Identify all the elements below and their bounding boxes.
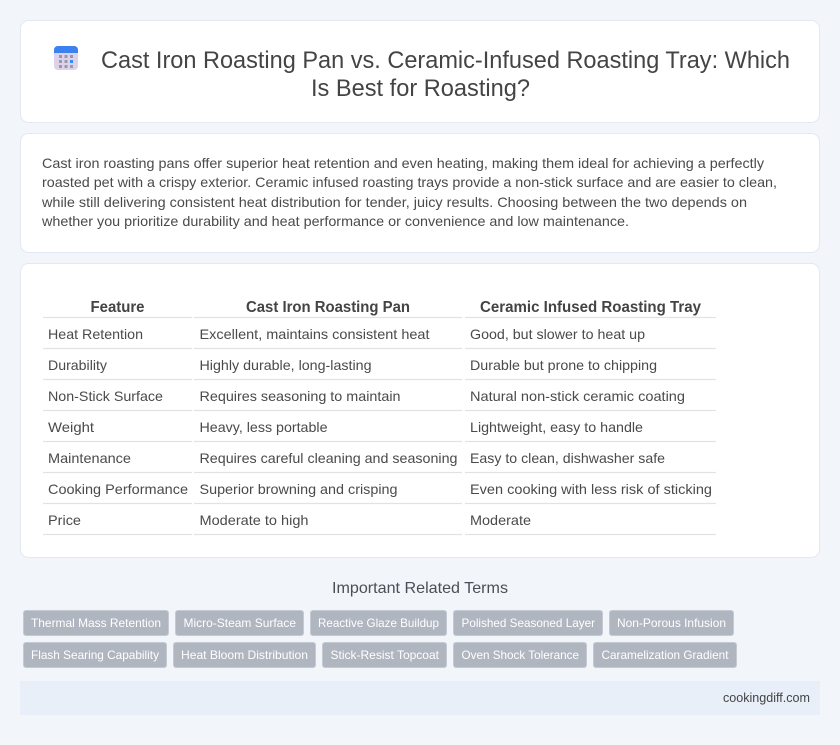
tag (322, 642, 446, 668)
tag: Caramelization Gradient (602, 648, 729, 662)
row: cooking performance: Even cooking with less risk of sticking (470, 481, 712, 497)
tag (454, 642, 586, 668)
row: durability: Durability (48, 357, 107, 373)
row: non-stick surface: Natural non-stick ceramic coating (470, 388, 685, 404)
tag: Thermal Mass Retention (31, 616, 161, 630)
summary text (41, 155, 777, 229)
tag: Flash Searing Capability (31, 648, 159, 662)
tag (594, 642, 736, 668)
row: weight: Lightweight, easy to handle (470, 419, 643, 435)
tag: Non-Porous Infusion (617, 616, 726, 630)
row: price: Price (48, 512, 81, 528)
row: heat retention: Good, but slower to heat up (470, 326, 645, 342)
table header (90, 299, 701, 316)
footer source: cookingdiff.com (723, 690, 810, 705)
panel: comparison table (20, 264, 820, 558)
tag: Micro-Steam Surface (184, 616, 296, 630)
title: Is Best for Roasting? (311, 75, 530, 102)
row: heat retention: Heat Retention (48, 326, 143, 342)
summary text: roasted pet with a crispy exterior. Ceramic infused roasting trays provide a non-stick surface and are easier to clean, (42, 174, 777, 190)
row: cooking performance (48, 481, 712, 497)
summary text: whether you prioritize durability and heat performance or convenience and low maintenance. (41, 213, 629, 229)
tag (174, 642, 316, 668)
panel: title card (20, 20, 820, 122)
row: price: Moderate to high (200, 512, 308, 528)
tag (24, 642, 166, 668)
icon: calendar (54, 46, 78, 70)
row: non-stick surface: Non-Stick Surface (48, 388, 163, 404)
row: weight: Heavy, less portable (200, 419, 328, 435)
tag cloud (24, 610, 736, 668)
row: heat retention (48, 326, 645, 342)
row: maintenance: Maintenance (48, 450, 131, 466)
tag (24, 610, 168, 636)
row: price: Moderate (470, 512, 531, 528)
tag: Polished Seasoned Layer (462, 616, 595, 630)
row: durability (48, 357, 657, 373)
row: weight: Weight (48, 419, 94, 435)
tag: Reactive Glaze Buildup (318, 616, 439, 630)
footer bar (20, 681, 820, 715)
table header: Ceramic Infused Roasting Tray (480, 299, 701, 316)
row: cooking performance: Superior browning and crisping (200, 481, 398, 497)
row: non-stick surface (48, 388, 685, 404)
row: non-stick surface: Requires seasoning to maintain (200, 388, 400, 404)
tag (176, 610, 304, 636)
tag (454, 610, 602, 636)
row: maintenance (48, 450, 665, 466)
row: cooking performance: Cooking Performance (48, 481, 188, 497)
tag (310, 610, 446, 636)
title (101, 47, 790, 102)
row: price (48, 512, 531, 528)
heading: important related terms: Important Related Terms (332, 580, 508, 597)
panel: summary card (20, 134, 820, 252)
row: heat retention: Excellent, maintains consistent heat (200, 326, 430, 342)
tag (610, 610, 734, 636)
title: Cast Iron Roasting Pan vs. Ceramic-Infused Roasting Tray: Which (101, 47, 790, 74)
table header: Feature (90, 299, 145, 316)
table header: Cast Iron Roasting Pan (246, 299, 410, 316)
row: durability: Durable but prone to chipping (470, 357, 657, 373)
summary text: while still delivering consistent heat distribution for tender, juicy results. Choosing between the two depends on (41, 194, 747, 210)
tag: Heat Bloom Distribution (181, 648, 308, 662)
row: maintenance: Easy to clean, dishwasher safe (470, 450, 665, 466)
row: durability: Highly durable, long-lasting (200, 357, 372, 373)
tag: Stick-Resist Topcoat (330, 648, 440, 662)
row: weight (48, 419, 643, 435)
summary text: Cast iron roasting pans offer superior heat retention and even heating, making them ideal for achieving a perfectly (42, 155, 764, 171)
tag: Oven Shock Tolerance (462, 648, 579, 662)
row: maintenance: Requires careful cleaning and seasoning (200, 450, 458, 466)
